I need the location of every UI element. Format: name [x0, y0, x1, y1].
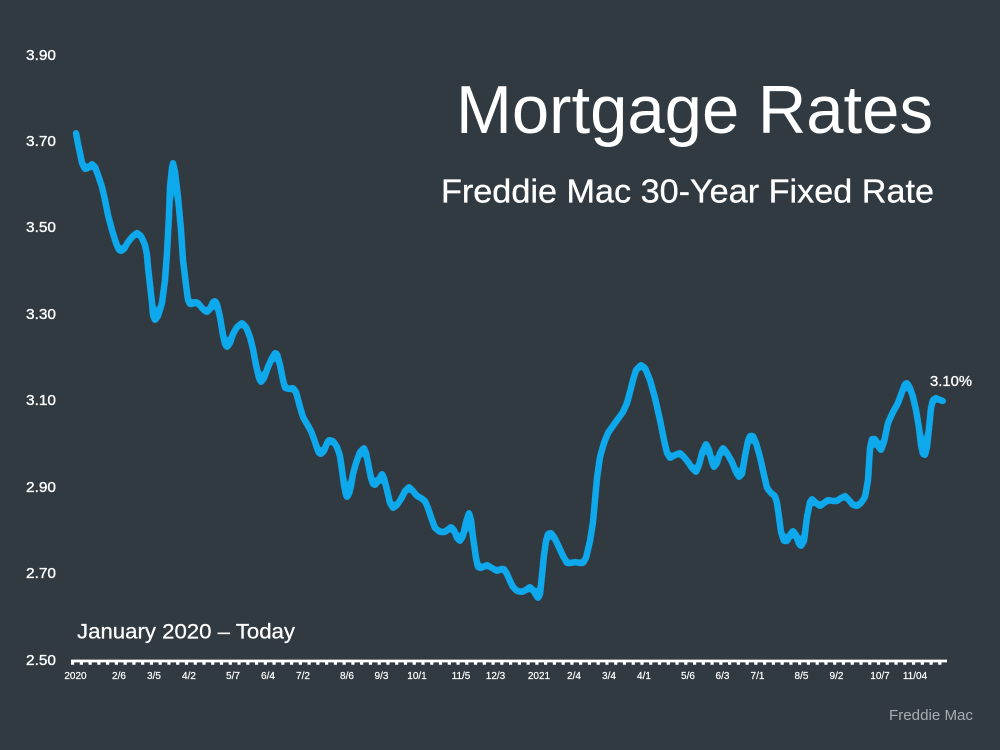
- x axis date labels: 6/3: [716, 671, 730, 682]
- x axis date labels: 5/6: [681, 671, 695, 682]
- date range label: January 2020 – Today: [77, 620, 295, 644]
- subtitle: Freddie Mac 30-Year Fixed Rate: [441, 172, 934, 210]
- y axis labels: [26, 48, 56, 669]
- x axis date labels: 7/1: [751, 671, 765, 682]
- end value label: 3.10%: [930, 374, 972, 390]
- x axis date labels: 4/2: [182, 671, 196, 682]
- y axis labels: 2.90: [26, 480, 56, 496]
- x axis date labels: 2/6: [112, 671, 126, 682]
- y axis labels: 3.30: [26, 307, 56, 323]
- x axis date labels: 8/5: [795, 671, 809, 682]
- y axis labels: 2.50: [26, 653, 56, 669]
- x axis date labels: 5/7: [226, 671, 240, 682]
- x axis date labels: 10/1: [407, 671, 427, 682]
- x axis date labels: 3/4: [602, 671, 616, 682]
- y axis labels: 2.70: [26, 566, 56, 582]
- x axis date labels: 9/2: [830, 671, 844, 682]
- x axis date labels: 7/2: [296, 671, 310, 682]
- x axis date labels: 6/4: [261, 671, 275, 682]
- y axis labels: 3.10: [26, 393, 56, 409]
- x axis date labels: 4/1: [637, 671, 651, 682]
- x axis date labels: 9/3: [375, 671, 389, 682]
- x axis date labels: 11/04: [903, 671, 928, 682]
- y axis labels: 3.50: [26, 220, 56, 236]
- x axis date labels: 2020: [64, 671, 87, 682]
- x axis date labels: [64, 671, 928, 682]
- x axis date labels: 2/4: [567, 671, 581, 682]
- x axis date labels: 8/6: [340, 671, 354, 682]
- x axis line with ticks: [71, 661, 947, 663]
- x axis date labels: 12/3: [486, 671, 506, 682]
- source label: Freddie Mac: [889, 708, 973, 724]
- line chart: mortgage rate: [76, 133, 943, 598]
- x axis date labels: 2021: [528, 671, 551, 682]
- x axis date labels: 11/5: [452, 671, 471, 682]
- x axis date labels: 10/7: [870, 671, 890, 682]
- y axis labels: 3.70: [26, 134, 56, 150]
- x axis date labels: 3/5: [147, 671, 161, 682]
- title: Mortgage Rates: [456, 72, 933, 148]
- y axis labels: 3.90: [26, 48, 56, 64]
